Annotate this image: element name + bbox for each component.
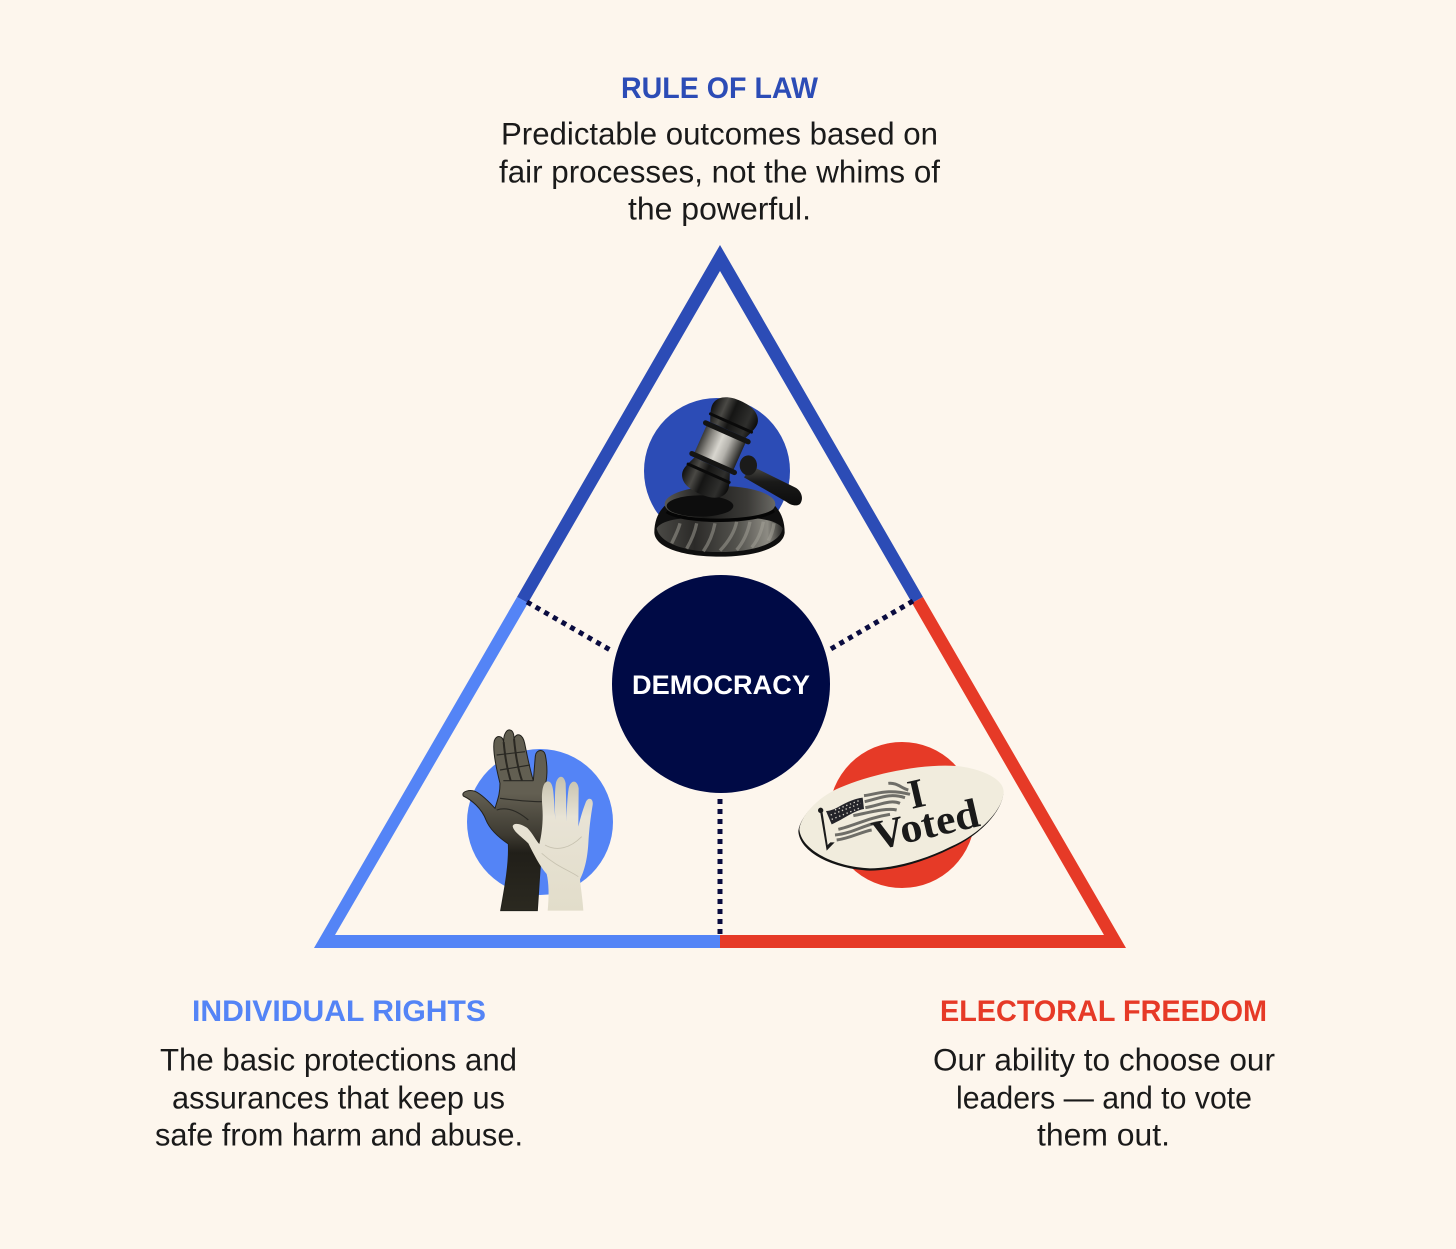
triangle side: individual rights (314, 597, 720, 948)
light raised hand (513, 777, 593, 911)
center circle: democracy (612, 575, 830, 793)
gavel sound block (654, 486, 785, 557)
section text: rule of law (499, 72, 940, 227)
heading: rule of law: RULE OF LAW (621, 72, 819, 105)
sticker oval (798, 766, 1004, 871)
description: individual rights: safe from harm and abuse. (155, 1117, 523, 1153)
description: electoral freedom: Our ability to choose our (933, 1042, 1275, 1078)
description: electoral freedom: them out. (1037, 1117, 1170, 1153)
description: rule of law: the powerful. (628, 191, 811, 227)
triangle frame (314, 245, 1126, 948)
sticker text: I (904, 770, 930, 819)
description: rule of law: Predictable outcomes based on (501, 116, 938, 152)
gavel head (676, 390, 764, 504)
icon: I Voted sticker on red circle (798, 742, 1004, 888)
icon: raised hands on blue circle (463, 730, 613, 911)
heading: individual rights: INDIVIDUAL RIGHTS (192, 995, 486, 1028)
triangle side: rule of law (517, 245, 923, 603)
dotted connectors (527, 601, 913, 935)
description: individual rights (155, 1042, 523, 1153)
center circle: democracy: DEMOCRACY (632, 670, 810, 700)
description: electoral freedom: leaders — and to vote (956, 1080, 1252, 1116)
dark raised hand (463, 730, 547, 911)
section text: electoral freedom (933, 995, 1275, 1153)
heading: electoral freedom: ELECTORAL FREEDOM (940, 995, 1267, 1028)
description: rule of law: fair processes, not the whims of (499, 154, 940, 190)
icon: gavel on blue circle (644, 390, 802, 557)
description: rule of law (499, 116, 940, 227)
description: electoral freedom (933, 1042, 1275, 1153)
flag (818, 783, 910, 851)
section text: individual rights (155, 995, 523, 1153)
description: individual rights: The basic protections and (160, 1042, 517, 1078)
gavel handle (740, 455, 802, 505)
description: individual rights: assurances that keep us (172, 1080, 505, 1116)
triangle side: electoral freedom (720, 597, 1126, 948)
sticker text: Voted (868, 791, 984, 860)
